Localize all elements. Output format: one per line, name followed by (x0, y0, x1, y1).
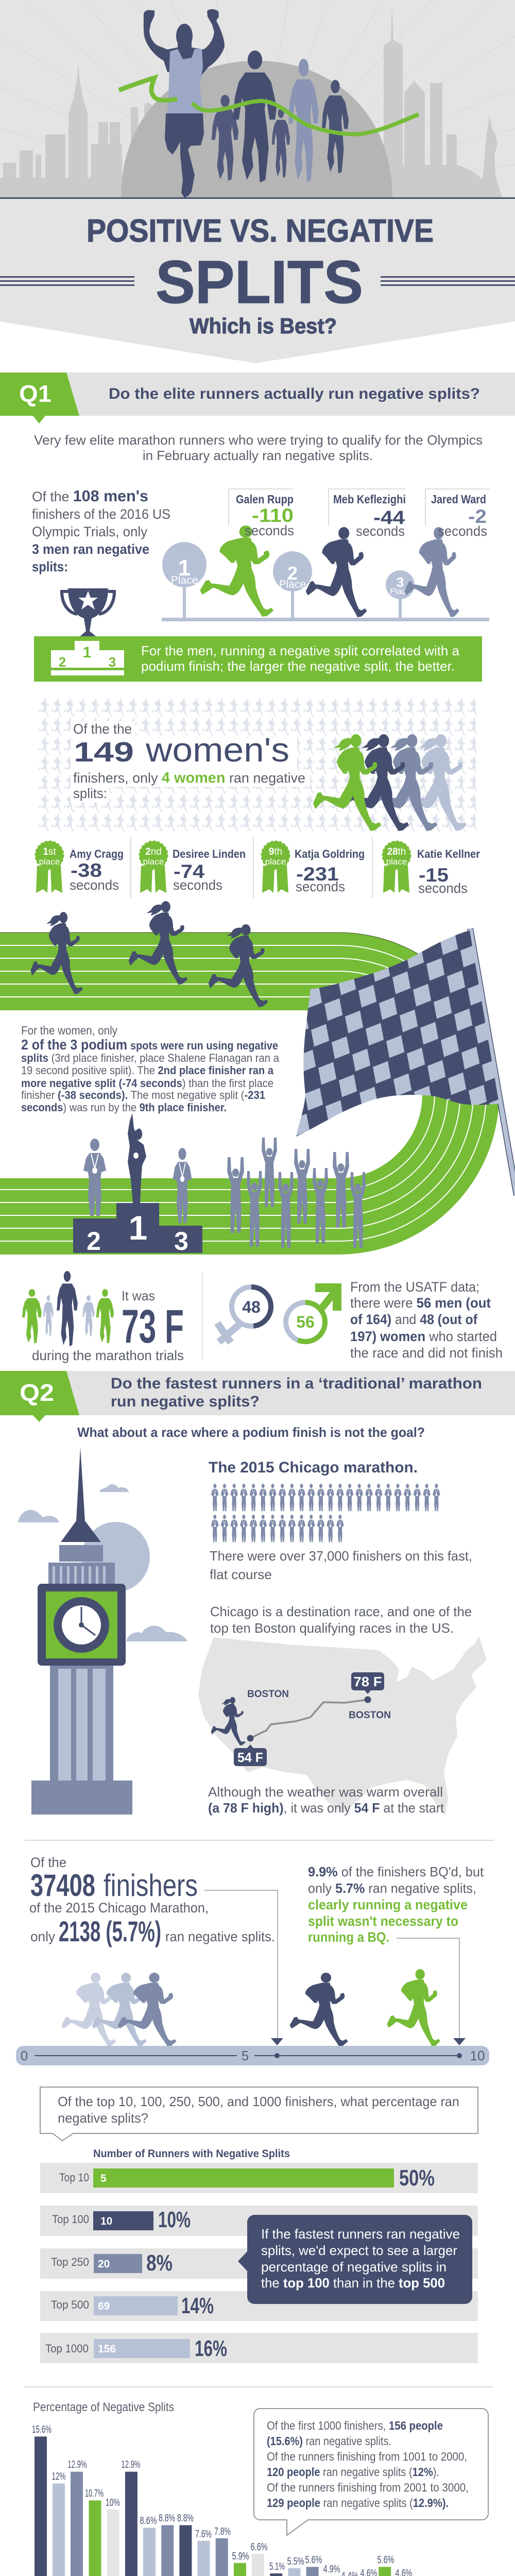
men's podium runners with place signs: Place (171, 574, 198, 586)
Q1 intro text (34, 432, 483, 463)
checkered flag (296, 928, 515, 1195)
hero illustration: runners and skyline (0, 0, 515, 199)
women's split awards: -231 (296, 863, 339, 885)
US map with route: Although the weather was warm overall (208, 1784, 443, 1800)
women's split awards: place (265, 857, 286, 867)
stat: 37408 finishers (29, 1855, 275, 1947)
column chart: percentage of negative splits by place: Percentage of Negative Splits (33, 2400, 174, 2414)
column chart: percentage of negative splits by place: 8.6% (140, 2515, 157, 2527)
men's negative split summary: splits: (32, 559, 68, 574)
women's podium with medalists (73, 1113, 202, 1256)
Chicago marathon intro: top ten Boston qualifying races in the US. (210, 1620, 454, 1636)
women's split awards: Desiree Linden (173, 848, 246, 860)
women's split awards: 1st (43, 846, 56, 857)
callout: fastest runners expectation: splits, we'd expect to see a larger (261, 2243, 457, 2258)
callout: fastest runners expectation: the top 100 than in the top 500 (261, 2275, 445, 2291)
scale bar 0 to 10 (16, 2046, 489, 2065)
stat: 37408 finishers: ran negative splits. (165, 1929, 275, 1944)
women podium text: 2 of the 3 podium (21, 1037, 127, 1053)
men's podium runners with place signs: Place (390, 587, 410, 596)
column chart: percentage of negative splits by place: 12% (52, 2471, 66, 2482)
did not finish rings: 48 (242, 1298, 261, 1316)
men's split cards: -110 (252, 505, 294, 526)
Q1 intro text: in February actually ran negative splits. (143, 448, 373, 463)
women's split awards: 28th (387, 846, 406, 857)
callout: first 3000 finishers: Of the runners finishing from 2001 to 3000, (267, 2481, 469, 2494)
header background (0, 0, 515, 363)
column chart: percentage of negative splits by place: 5.9% (232, 2551, 249, 2562)
horizontal bar chart: runners with negative splits: Top 250 (51, 2256, 89, 2268)
women's split awards: Amy Cragg (70, 848, 124, 860)
horizontal bar chart: runners with negative splits: 20 (98, 2258, 110, 2270)
callout: men podium correlation (34, 636, 482, 682)
men's negative split summary (32, 487, 170, 574)
column chart: percentage of negative splits by place: 7.6% (195, 2529, 212, 2540)
column chart: percentage of negative splits by place: 5.5% (287, 2556, 304, 2567)
men's negative split summary: 3 men ran negative (32, 541, 149, 557)
Q1 header (0, 372, 515, 423)
Q2 header (0, 1371, 515, 1422)
title (87, 213, 434, 338)
callout: first 3000 finishers: 129 people ran negative splits (12.9%). (267, 2496, 449, 2510)
column chart: percentage of negative splits by place: 12.9% (122, 2459, 141, 2470)
men's podium runners with place signs (162, 526, 489, 621)
women's split awards: seconds (70, 877, 119, 893)
Chicago marathon intro: Chicago is a destination race, and one of the (210, 1604, 472, 1619)
men's negative split summary: Olympic Trials, only (32, 524, 147, 539)
arrow: finishers to scale (204, 1890, 283, 2045)
US map with route: BOSTON (349, 1710, 391, 1721)
stat: BQ versus negative split: 9.9% of the finishers BQ'd, but (308, 1864, 484, 1879)
horizontal bar chart: runners with negative splits: 69 (98, 2300, 110, 2312)
question callout: Of the top 10, 100, 250, 500, and 1000 finishers, what percentage ran (58, 2094, 459, 2109)
column chart: percentage of negative splits by place: 8.8% (159, 2513, 175, 2524)
callout: men podium correlation: 2 (59, 654, 66, 670)
column chart: percentage of negative splits by place: 6.6% (250, 2541, 268, 2553)
column chart: percentage of negative splits by place: 10% (106, 2497, 120, 2509)
horizontal bar chart: runners with negative splits: 156 (98, 2343, 116, 2355)
panel: women's finishers pattern: Of the the (73, 721, 132, 737)
men's podium runners with place signs: 3 (397, 574, 404, 590)
women's split awards: seconds (296, 879, 345, 894)
USATF text: there were 56 men (out (350, 1295, 491, 1311)
women's split awards: place (39, 857, 60, 867)
panel: women's finishers pattern (38, 698, 476, 832)
women's split awards: -15 (419, 865, 449, 886)
horizontal bar chart: runners with negative splits: 14% (181, 2293, 214, 2318)
stat: 37408 finishers: of the 2015 Chicago Marathon, (29, 1900, 209, 1916)
horizontal bar chart: runners with negative splits: 50% (399, 2165, 435, 2191)
men's podium runners with place signs: 2 (287, 563, 298, 584)
men's negative split summary: Of the 108 men's (32, 487, 148, 505)
stat: 37408 finishers: finishers (104, 1868, 198, 1903)
column chart: percentage of negative splits by place (32, 2400, 482, 2576)
Chicago marathon intro: flat course (210, 1567, 272, 1582)
women's split awards: 9th (269, 846, 282, 857)
Chicago marathon intro (209, 1459, 472, 1636)
question callout: negative splits? (58, 2110, 148, 2126)
stat: BQ versus negative split: split wasn't necessary to (308, 1913, 458, 1929)
Q1 header: Q1 (19, 380, 52, 407)
horizontal bar chart: runners with negative splits: Number of Runners with Negative Splits (93, 2148, 290, 2160)
US map with route (198, 1636, 487, 1816)
horizontal bar chart: runners with negative splits: 5 (100, 2173, 107, 2184)
USATF text: From the USATF data; (350, 1279, 479, 1295)
column chart: percentage of negative splits by place: 5.6% (377, 2554, 394, 2566)
USATF text (350, 1279, 503, 1361)
icon: trophy (62, 588, 114, 638)
women podium text: For the women, only (21, 1024, 117, 1037)
men's split cards: Jared Ward (431, 493, 486, 506)
callout: first 3000 finishers: 120 people ran negative splits (12%). (267, 2465, 439, 2479)
scale bar 0 to 10: 10 (470, 2048, 485, 2063)
US map with route: BOSTON (247, 1689, 289, 1700)
temperature stat: It was (122, 1288, 155, 1303)
women's split awards: seconds (418, 880, 468, 896)
men's podium runners with place signs: Place (279, 579, 306, 590)
title: Which is Best? (190, 314, 337, 338)
horizontal bar chart: runners with negative splits: Top 10 (59, 2171, 89, 2184)
women's split awards (36, 837, 480, 898)
Q2 header: Q2 (20, 1379, 54, 1406)
callout: first 3000 finishers: Of the runners finishing from 1001 to 2000, (267, 2450, 467, 2463)
column chart: percentage of negative splits by place: 12.9% (68, 2459, 87, 2470)
horizontal bar chart: runners with negative splits: Top 500 (51, 2298, 89, 2311)
Chicago marathon intro: The 2015 Chicago marathon. (209, 1459, 418, 1476)
Q2 subheading: What about a race where a podium finish is not the goal? (77, 1425, 425, 1440)
men's podium runners with place signs: 1 (178, 555, 191, 581)
women podium text: splits (3rd place finisher, place Shalene Flanagan ran a (21, 1052, 280, 1064)
men's split cards: seconds (356, 523, 405, 539)
men's split cards: seconds (245, 523, 294, 538)
did not finish rings (217, 1283, 341, 1343)
horizontal bar chart: runners with negative splits (40, 2148, 478, 2363)
US map with route: 54 F (237, 1750, 263, 1765)
callout: first 3000 finishers: (15.6%) ran negative splits. (267, 2434, 391, 2448)
Q1 intro text: Very few elite marathon runners who were trying to qualify for the Olympics (34, 432, 483, 448)
men's split cards (229, 489, 489, 539)
horizontal bar chart: runners with negative splits: 16% (195, 2336, 227, 2361)
horizontal bar chart: runners with negative splits: 10 (100, 2215, 112, 2227)
women podium text: seconds) was run by the 9th place finisher. (21, 1101, 227, 1114)
column chart: percentage of negative splits by place: 7.8% (214, 2526, 231, 2537)
women podium text (21, 1024, 280, 1114)
horizontal bar chart: runners with negative splits: Top 100 (52, 2213, 89, 2226)
callout: men podium correlation: 3 (109, 654, 116, 670)
US map with route: (a 78 F high), it was only 54 F at the start (208, 1800, 444, 1816)
stat: 37408 finishers: Of the (30, 1855, 66, 1870)
panel: women's finishers pattern: 149 (74, 737, 134, 768)
callout: first 3000 finishers (254, 2409, 488, 2535)
Q2 header: run negative splits? (111, 1393, 260, 1410)
USATF text: of 164) and 48 (out of (350, 1312, 478, 1327)
women's split awards: place (143, 857, 164, 867)
callout: fastest runners expectation (238, 2215, 472, 2304)
stat: 37408 finishers: 37408 (30, 1868, 95, 1903)
stat: BQ versus negative split: clearly running a negative (308, 1897, 468, 1912)
stat: 37408 finishers: 2138 (5.7%) (59, 1915, 161, 1947)
men's negative split summary: finishers of the 2016 US (32, 506, 170, 522)
scale bar 0 to 10: 0 (21, 2048, 28, 2063)
women podium text: spots were run using negative (130, 1039, 278, 1052)
callout: fastest runners expectation: If the fastest runners ran negative (261, 2226, 460, 2242)
question callout (40, 2087, 478, 2141)
USATF text: 197) women who started (350, 1329, 497, 1344)
Q2 header: Do the fastest runners in a ‘traditional’ marathon (111, 1375, 482, 1392)
three women running on the track (30, 901, 268, 1007)
US map with route: 78 F (353, 1674, 382, 1689)
women podium text: 19 second positive split). The 2nd place finisher ran a (21, 1064, 274, 1077)
men's split cards: Meb Keflezighi (333, 493, 406, 506)
women's podium with medalists: 1 (129, 1209, 147, 1247)
horizontal bar chart: runners with negative splits: Top 1000 (45, 2342, 89, 2355)
column chart: percentage of negative splits by place: 5.6% (305, 2554, 322, 2566)
column chart: percentage of negative splits by place: 4.9% (323, 2564, 340, 2575)
stat: 37408 finishers: only (30, 1929, 55, 1944)
women's split awards: 2nd (145, 846, 162, 857)
running track (0, 933, 500, 1255)
panel: women's finishers pattern: women's (145, 731, 289, 769)
callout: fastest runners expectation: percentage of negative splits in (261, 2259, 447, 2275)
callout: men podium correlation: podium finish; the larger the negative split, the better. (141, 658, 455, 674)
callout: men podium correlation: 1 (83, 644, 91, 661)
column chart: percentage of negative splits by place: 15.6% (32, 2424, 52, 2435)
horizontal bar chart: runners with negative splits: 10% (158, 2207, 191, 2232)
women's split awards: -74 (174, 861, 204, 882)
women's split awards: -38 (71, 860, 102, 881)
runners above scale (61, 1969, 440, 2046)
callout: first 3000 finishers: Of the first 1000 finishers, 156 people (267, 2419, 443, 2432)
women's split awards: Katja Goldring (295, 848, 365, 860)
stat: BQ versus negative split: only 5.7% ran negative splits, (308, 1880, 476, 1896)
women podium text: finisher (-38 seconds). The most negative split (-231 (21, 1089, 265, 1101)
title: SPLITS (156, 248, 363, 316)
stat: BQ versus negative split (308, 1864, 484, 1945)
men's split cards: -44 (373, 507, 405, 528)
panel: women's finishers pattern: finishers, only 4 women ran negative (73, 770, 305, 786)
illustration: clock tower (18, 1447, 187, 1815)
men's split cards: seconds (438, 523, 487, 539)
stat: BQ versus negative split: running a BQ. (308, 1929, 389, 1945)
women's podium with medalists: 3 (174, 1227, 188, 1256)
Q1 header: Do the elite runners actually run negative splits? (109, 385, 480, 402)
USATF text: the race and did not finish (350, 1345, 503, 1361)
temperature stat (22, 1271, 184, 1363)
women's split awards: Katie Kellner (417, 848, 480, 860)
scale bar 0 to 10: 5 (242, 2048, 249, 2063)
women podium text: more negative split (-74 seconds) than the first place (21, 1077, 273, 1090)
callout: men podium correlation: For the men, running a negative split correlated with a (141, 643, 460, 658)
horizontal bar chart: runners with negative splits: 8% (146, 2250, 173, 2276)
women's split awards: place (386, 857, 407, 867)
temperature stat: during the marathon trials (32, 1348, 184, 1363)
column chart: percentage of negative splits by place: 8.8% (177, 2513, 194, 2524)
Chicago marathon intro: There were over 37,000 finishers on this fast, (210, 1548, 472, 1564)
temperature stat: 73 F (122, 1300, 184, 1353)
column chart: percentage of negative splits by place: 5.1% (269, 2561, 285, 2572)
title: POSITIVE VS. NEGATIVE (87, 213, 434, 249)
women's podium with medalists: 2 (87, 1227, 101, 1256)
men's split cards: -2 (468, 506, 487, 527)
panel: women's finishers pattern: splits: (73, 786, 107, 801)
cheering crowd (227, 1138, 366, 1248)
arrow: BQ text to scale (397, 1938, 466, 2045)
men's split cards: Galen Rupp (236, 493, 294, 506)
women's split awards: seconds (173, 877, 222, 893)
did not finish rings: 56 (296, 1313, 315, 1331)
column chart: percentage of negative splits by place: 10.7% (85, 2488, 104, 2499)
